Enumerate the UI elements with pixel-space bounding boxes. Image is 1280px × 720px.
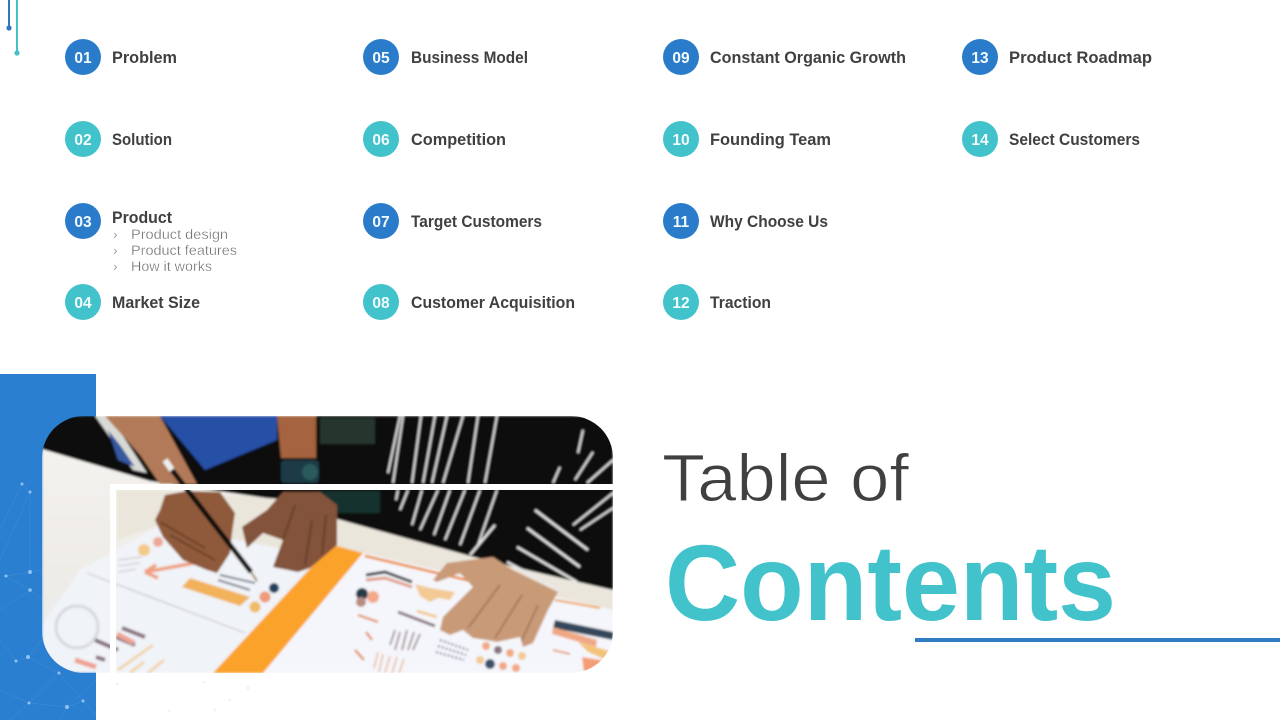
item 10 Founding Team: 10 [672, 132, 690, 149]
blue side panel with network pattern [0, 374, 96, 720]
item 07 Target Customers: 07 [372, 214, 390, 231]
item 12 Traction [663, 284, 771, 320]
item 02 Solution [65, 121, 172, 157]
item 04 Market Size [65, 284, 200, 320]
sub-list: product topics: Product design [131, 227, 228, 242]
item 03 Product with sub-list [65, 203, 237, 274]
decorative top lines [6, 0, 20, 56]
item 09 Constant Organic Growth [663, 39, 906, 75]
item 01 Problem [65, 39, 177, 75]
photo striped shirt [388, 416, 613, 590]
item 06 Competition [363, 121, 506, 157]
item 14 Select Customers: 14 [971, 132, 989, 149]
item 01 Problem: Problem [112, 48, 177, 67]
sub-list: product topics: › [113, 259, 118, 274]
item 02 Solution: Solution [112, 130, 172, 149]
photo hands and pen [155, 460, 558, 647]
item 01 Problem: 01 [74, 50, 92, 67]
photo desk surface [42, 447, 613, 636]
item 10 Founding Team [663, 121, 831, 157]
item 13 Product Roadmap: 13 [971, 50, 989, 67]
item 06 Competition: Competition [411, 130, 506, 149]
item 07 Target Customers: Target Customers [411, 212, 542, 231]
photo dark background and shirt [42, 416, 613, 590]
item 06 Competition: 06 [372, 132, 390, 149]
item 11 Why Choose Us [663, 203, 828, 239]
item 13 Product Roadmap: Product Roadmap [1009, 48, 1152, 67]
item 11 Why Choose Us: 11 [673, 214, 690, 231]
heading underline [915, 638, 1280, 642]
photo papers with charts [42, 525, 613, 673]
item 13 Product Roadmap [962, 39, 1152, 75]
sub-list: product topics: Product features [131, 243, 237, 258]
sub-list: product topics: › [113, 243, 118, 258]
item 11 Why Choose Us: Why Choose Us [710, 212, 828, 231]
item 10 Founding Team: Founding Team [710, 130, 831, 149]
heading: Table of: Table of [662, 441, 909, 516]
item 14 Select Customers: Select Customers [1009, 130, 1140, 149]
item 08 Customer Acquisition: 08 [372, 295, 390, 312]
item 08 Customer Acquisition: Customer Acquisition [411, 293, 575, 312]
item 04 Market Size: 04 [74, 295, 92, 312]
white photo frame [110, 484, 613, 680]
item 03 Product with sub-list: 03 [74, 214, 92, 231]
photo left arm and blue shirt [95, 416, 380, 513]
item 07 Target Customers [363, 203, 542, 239]
item 02 Solution: 02 [74, 132, 92, 149]
heading: Contents: Contents [665, 522, 1116, 643]
item 09 Constant Organic Growth: 09 [672, 50, 690, 67]
photo: hands working on charts at a desk [42, 416, 613, 673]
item 12 Traction: Traction [710, 293, 771, 312]
item 05 Business Model [363, 39, 528, 75]
item 03 Product with sub-list: Product [112, 208, 172, 227]
sub-list: product topics [113, 227, 237, 274]
item 12 Traction: 12 [672, 295, 690, 312]
item 09 Constant Organic Growth: Constant Organic Growth [710, 48, 906, 67]
contents list [65, 39, 1152, 320]
item 14 Select Customers [962, 121, 1140, 157]
faint network dots on white [116, 680, 250, 712]
photo beige desk strip [117, 490, 613, 610]
sub-list: product topics: How it works [131, 259, 212, 274]
item 05 Business Model: 05 [372, 50, 390, 67]
sub-list: product topics: › [113, 227, 118, 242]
item 04 Market Size: Market Size [112, 293, 200, 312]
item 05 Business Model: Business Model [411, 48, 528, 67]
item 08 Customer Acquisition [363, 284, 575, 320]
